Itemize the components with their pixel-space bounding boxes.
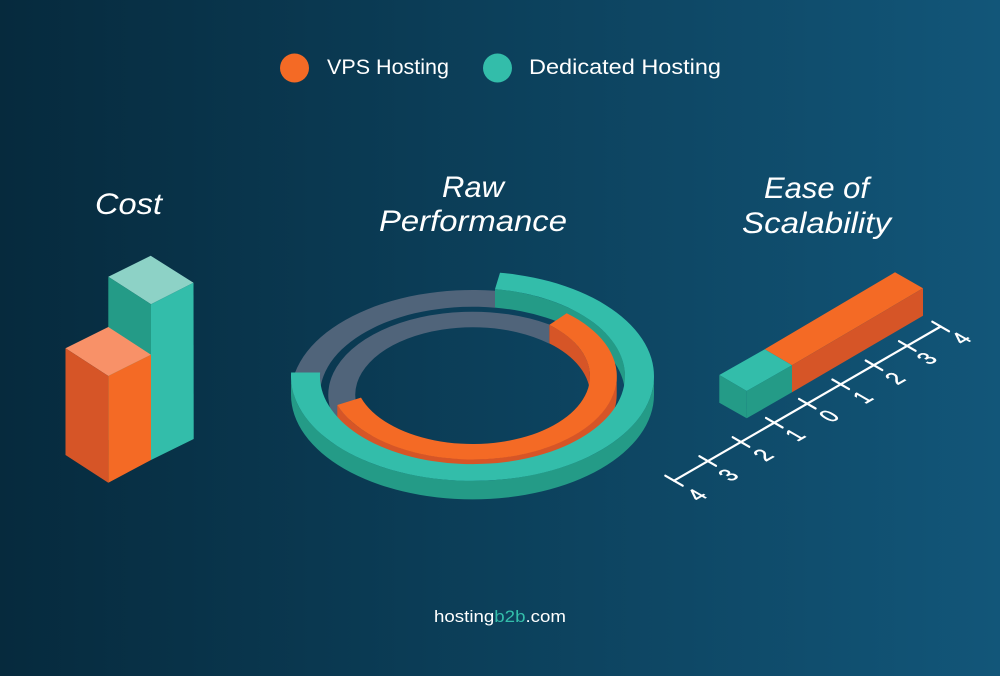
ring chart: Raw Performance	[291, 273, 654, 499]
teal arc inner wall	[495, 289, 625, 395]
heading: Ease of Scalability: Ease of	[764, 172, 872, 205]
isometric bar and axis: Ease of Scalability	[665, 272, 978, 505]
heading: Raw Performance: Raw	[442, 171, 506, 204]
scale labels: 4	[945, 329, 978, 348]
teal arc top surface: Dedicated Hosting	[291, 273, 654, 481]
orange arc top surface: VPS Hosting	[337, 313, 617, 459]
scale labels: 2	[879, 369, 912, 388]
grey track: outer ring	[291, 290, 495, 395]
heading: Raw Performance: Performance	[379, 205, 567, 238]
legend label: Dedicated Hosting: Dedicated Hosting	[529, 56, 721, 79]
scale labels: 2	[747, 445, 780, 465]
teal arc outer wall	[291, 376, 654, 499]
isometric bar chart: Cost	[66, 256, 194, 483]
legend marker: Dedicated Hosting	[483, 54, 512, 82]
footer: site name: hosting b2b.com	[434, 607, 566, 626]
teal bar segment: Dedicated Hosting	[719, 349, 792, 418]
scale labels: 1	[846, 388, 879, 407]
heading: Cost: Cost	[95, 188, 164, 221]
orange bar: VPS Hosting	[66, 327, 151, 483]
orange arc inner wall	[549, 325, 590, 395]
heading: Raw Performance	[379, 171, 567, 238]
scale labels: 1	[779, 425, 812, 445]
orange arc outer wall	[337, 376, 617, 478]
scale axis	[665, 322, 949, 486]
scale labels: 3	[910, 349, 943, 368]
heading: Ease of Scalability	[742, 172, 893, 240]
legend	[280, 54, 721, 82]
grey track: inner ring	[328, 312, 549, 424]
teal bar: Dedicated Hosting	[108, 256, 194, 460]
scale labels: 0	[813, 406, 846, 426]
orange bar segment: VPS Hosting	[765, 272, 923, 392]
scale labels	[680, 329, 978, 505]
scale labels: 4	[680, 485, 713, 505]
legend marker: VPS Hosting	[280, 54, 309, 82]
legend label: VPS Hosting: VPS Hosting	[327, 56, 449, 79]
heading: Ease of Scalability: Scalability	[742, 207, 893, 240]
scale labels: 3	[712, 465, 745, 485]
